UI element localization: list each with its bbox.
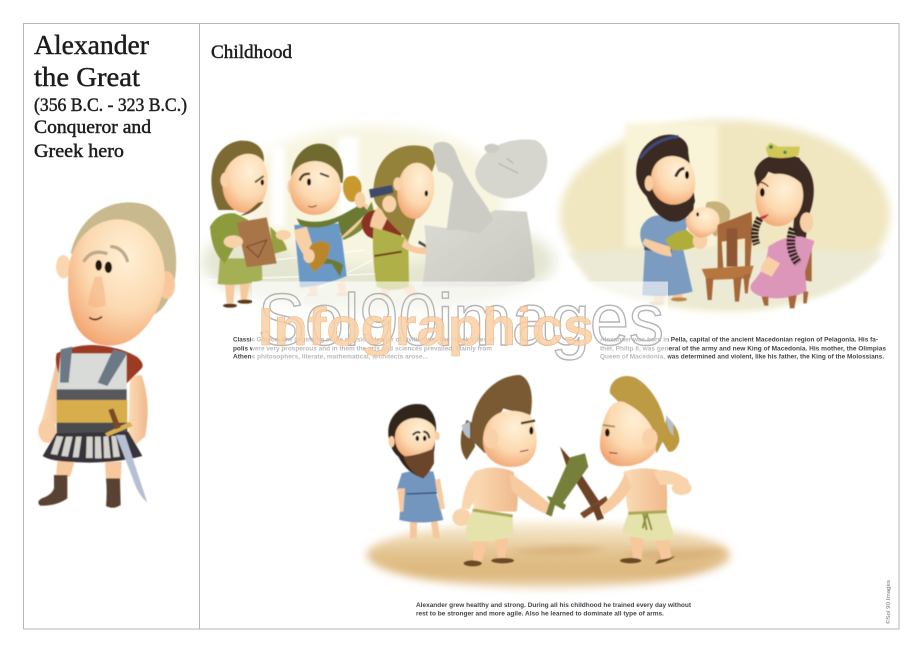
caption: training: rest to be stronger and more agile. Also he learned to dominate all type of arms. xyxy=(416,610,664,618)
watermark panel xyxy=(252,282,668,362)
caption: classic Greece: Classic Greece. The beginning of the classic splendor of civilization. The Greek cities or xyxy=(233,336,496,344)
wooden chair xyxy=(702,212,754,302)
figure: boy with green wooden sword xyxy=(452,375,552,566)
title block: Conqueror and xyxy=(34,117,152,138)
caption: training: Alexander grew healthy and strong. During all his childhood he trained every day without xyxy=(416,602,692,609)
caption: classic Greece: polis were very prosperous and in them the arts and sciences prevailed. Mainly from xyxy=(233,346,492,352)
title block: Alexander xyxy=(34,30,149,60)
title block xyxy=(34,30,187,162)
caption: classic Greece xyxy=(233,336,496,360)
figure: marble statue xyxy=(422,139,547,287)
crossed wooden swords xyxy=(546,447,608,521)
section heading: Childhood: Childhood xyxy=(211,42,293,63)
title block: (356 B.C. - 323 B.C.) xyxy=(34,95,187,116)
title block: the Great xyxy=(34,62,141,92)
caption: birth of Alexander xyxy=(600,336,887,360)
figure: young Alexander xyxy=(600,376,692,564)
caption: classic Greece: Athens philosophers, literate, mathematical, architects arose... xyxy=(233,354,428,360)
figure: geometer with tablet xyxy=(210,141,291,308)
caption: training xyxy=(416,602,692,618)
illustration: Alexander in armour xyxy=(38,202,176,508)
figure: sculptor with hammer xyxy=(362,145,445,297)
caption: birth of Alexander: Alexander was born in Pella, capital of the ancient Macedonian region of Pelagonia. His fa- xyxy=(600,336,878,344)
scene background xyxy=(202,127,555,312)
caption: birth of Alexander: ther, Philip II, was general of the army and new King of Macedonia. His mother, the Olimpias xyxy=(600,346,887,352)
title block: Greek hero xyxy=(34,141,124,162)
illustration: sword training scene xyxy=(367,375,730,588)
illustration: classic Greece scene xyxy=(202,127,555,312)
figure: queen Olympias xyxy=(750,142,814,308)
caption: birth of Alexander: Queen of Macedonia, was determined and violent, like his father, the King of the Molossians. xyxy=(600,354,884,360)
watermark: outlined wordmark: Sol90images xyxy=(258,280,664,361)
illustration: birth of Alexander scene xyxy=(560,120,890,310)
copyright credit: ©Sol 90 Images xyxy=(885,580,892,624)
watermark: Infographics: Infographics xyxy=(258,298,594,357)
oval palace background xyxy=(560,120,890,310)
figure: actor with golden masks xyxy=(287,144,375,296)
sandy ground xyxy=(367,522,730,588)
figure: Philip holding baby xyxy=(636,135,730,305)
figure: teacher watching xyxy=(388,404,445,538)
